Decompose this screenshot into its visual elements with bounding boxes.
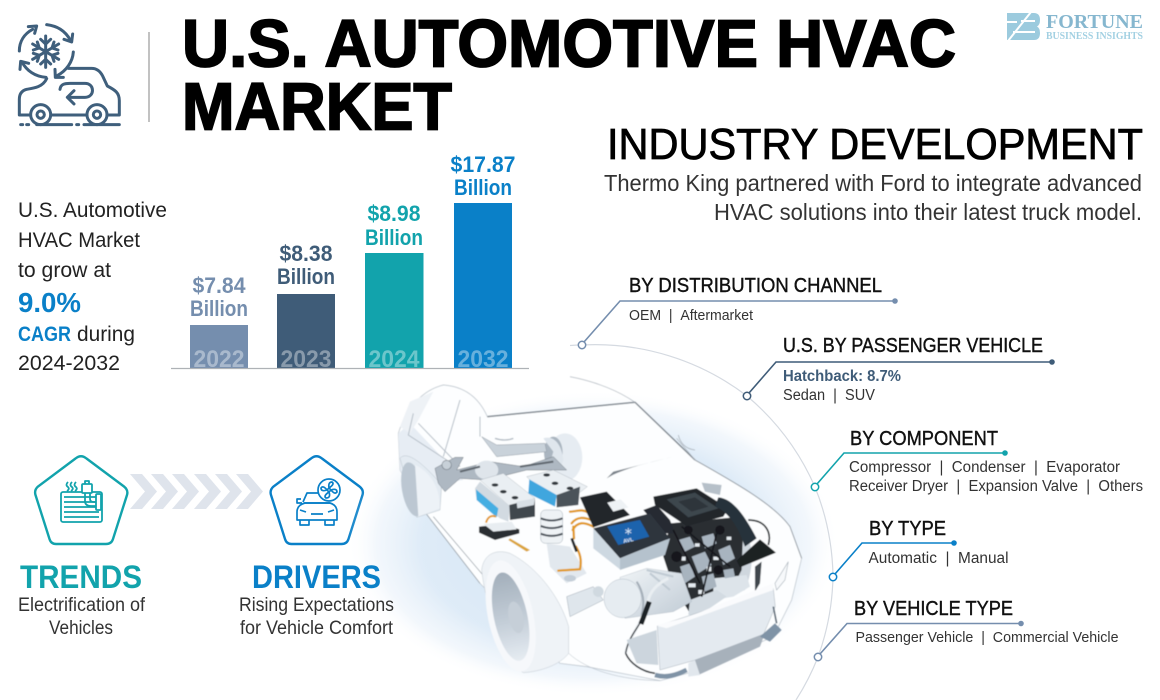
callout: by distribution channel [578,275,898,349]
front bumper and grille [657,562,788,677]
industry development heading: INDUSTRY DEVELOPMENT [607,120,1143,169]
CAGR summary text: during [77,323,135,346]
CAGR summary text: to grow at [18,259,111,282]
drivers caption [239,559,394,639]
callout: by type: Automatic | Manual [868,550,1008,567]
CAGR summary text: HVAC Market [18,229,140,252]
bar 2022: $7.84 [192,273,246,298]
bar 2024: $8.98 [368,201,420,226]
bar 2024: 2024 [368,346,420,373]
callout: by type: BY TYPE [869,518,946,540]
transmission cylinder [567,568,692,618]
callout: by vehicle type: BY VEHICLE TYPE [854,598,1013,620]
logo: Fortune Business Insights: FORTUNE [1046,11,1143,33]
bar 2023 [277,241,335,373]
CAGR summary text: 9.0% [18,287,81,318]
far-side wheel [543,433,582,481]
industry development description: HVAC solutions into their latest truck model. [714,199,1142,225]
rear axle and plate [435,437,567,492]
callout: by component: Receiver Dryer | Expansion Valve | Others [849,478,1143,495]
CAGR summary text: CAGR [18,323,71,346]
lower cooling hose [626,578,687,676]
callout: by component: Compressor | Condenser | Evaporator [849,459,1120,476]
bar 2032: $17.87 [450,152,516,177]
drivers caption: Rising Expectations [239,595,394,616]
CAGR summary text: U.S. Automotive [18,199,167,222]
callout: U.S. by passenger vehicle: Hatchback: 8.7% [783,368,901,385]
callout: by type [829,518,1008,581]
bar 2022: Billion [190,296,248,321]
bar 2032 [450,152,516,373]
callout: by vehicle type [814,598,1118,661]
front wheel [477,552,569,676]
trends caption [18,559,146,639]
callout: by component [811,428,1143,495]
industry development description [604,170,1142,225]
bar 2024: Billion [365,225,423,250]
title: MARKET [182,70,452,144]
trends caption: Electrification of [18,595,146,616]
small bracket and orange wire [479,516,530,552]
logo: Fortune Business Insights: BUSINESS INSIGHTS [1046,31,1143,42]
header icon: car with snowflake and circular arrows [19,25,119,125]
bar 2032: Billion [454,175,512,200]
bar 2023: Billion [277,264,335,289]
bar 2032: 2032 [458,346,508,373]
bar 2022: 2022 [194,346,244,373]
rear wheel [397,456,442,518]
callout: by distribution channel: OEM | Aftermarket [629,307,754,324]
bar 2024 [365,201,424,373]
control unit box: AVL [623,537,635,545]
orbit arc behind callouts [570,345,833,700]
drivers caption: for Vehicle Comfort [240,618,394,639]
front shock absorber [541,510,587,583]
arrow: chevrons from trends to drivers [130,474,263,509]
trends pentagon with radiator icon [35,456,127,544]
callout: by vehicle type: Passenger Vehicle | Commercial Vehicle [856,629,1118,646]
industry development block [604,120,1143,225]
bar chart [190,152,516,373]
engine [643,483,776,615]
callout: U.S. by passenger vehicle: U.S. BY PASSENGER VEHICLE [783,335,1043,357]
callout: U.S. by passenger vehicle: Sedan | SUV [783,387,876,404]
CAGR summary text: 2024-2032 [18,352,120,375]
callout: by component: BY COMPONENT [850,428,998,450]
header divider [148,32,150,122]
car body shell [398,385,802,681]
CAGR summary text [18,199,167,375]
trends caption: TRENDS [20,559,142,595]
bar 2023: 2023 [280,346,332,373]
drivers pentagon with car and fan icon [271,456,363,544]
callout: U.S. by passenger vehicle [743,335,1055,404]
bar 2023: $8.38 [280,241,332,266]
car cutaway illustration [347,377,840,697]
trends caption: Vehicles [49,618,113,639]
title: U.S. AUTOMOTIVE HVAC [182,6,956,82]
callout: by distribution channel: BY DISTRIBUTION CHANNEL [629,275,882,297]
control unit box [580,492,670,570]
industry development description: Thermo King partnered with Ford to integrate advanced [604,170,1142,196]
bar 2022 [190,273,248,373]
battery modules [475,470,587,522]
drivers caption: DRIVERS [252,559,381,595]
orange cables [558,510,593,571]
title [182,6,956,144]
logo: Fortune Business Insights [1007,11,1143,42]
